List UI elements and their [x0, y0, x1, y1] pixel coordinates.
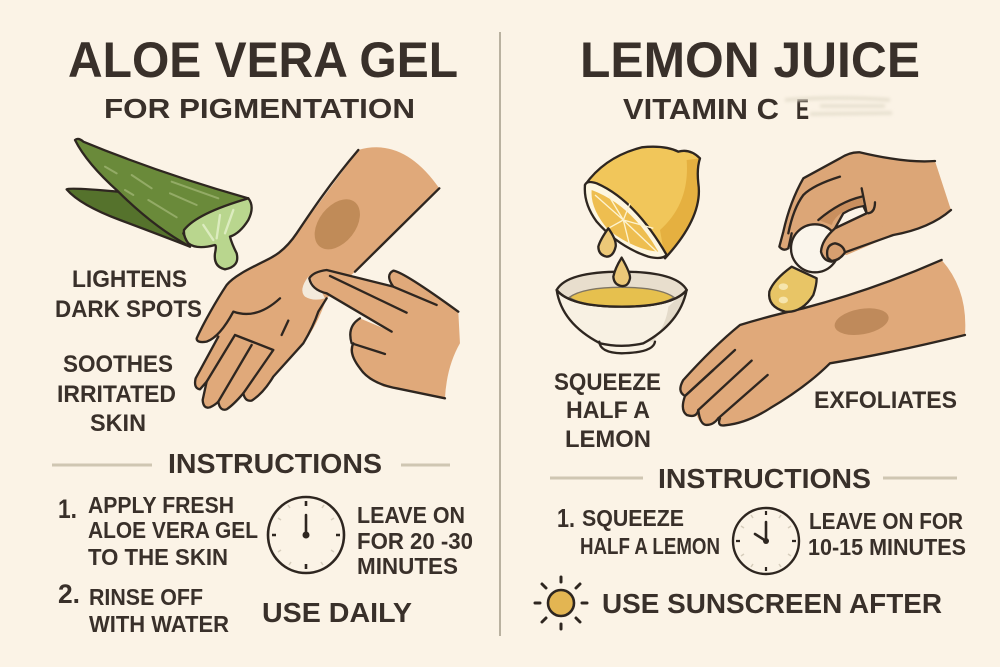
illustration: lower arm with dark spot [680, 260, 965, 425]
illustration: hands applying gel [195, 147, 460, 410]
benefit: exfoliates: EXFOLIATES [814, 387, 957, 414]
step 2: rinse [58, 579, 229, 637]
step 1: squeeze half a lemon: SQUEEZE [582, 505, 684, 531]
note: use sunscreen after: USE SUNSCREEN AFTER [602, 588, 942, 619]
step 1: apply gel: APPLY FRESH [88, 492, 234, 518]
subtitle: vitamin c e [623, 94, 892, 126]
illustration: lemon half [585, 147, 700, 258]
step 2: rinse: RINSE OFF [89, 584, 203, 610]
benefit: soothes irritated skin: SKIN [90, 410, 146, 437]
step 1: apply gel: ALOE VERA GEL [88, 517, 258, 543]
heading: instructions: INSTRUCTIONS [658, 463, 871, 494]
title: lemon juice: LEMON JUICE [580, 32, 920, 88]
panel: lemon juice [535, 32, 966, 629]
step 1: apply gel: 1. [58, 494, 77, 524]
benefit: lightens dark spots [55, 266, 202, 323]
step 1: apply gel: TO THE SKIN [88, 544, 228, 570]
duration: leave on 20-30 minutes: FOR 20 -30 [357, 528, 473, 554]
step 1: apply gel [58, 492, 258, 570]
benefit: soothes irritated skin: SOOTHES [63, 351, 173, 378]
subtitle: for pigmentation: FOR PIGMENTATION [104, 93, 415, 124]
benefit: soothes irritated skin: IRRITATED [57, 381, 176, 408]
panel: aloe vera gel [52, 32, 473, 637]
icon: clock [268, 497, 344, 573]
duration: leave on 10-15 minutes [808, 508, 966, 560]
title: aloe vera gel: ALOE VERA GEL [68, 32, 458, 88]
label: squeeze half a lemon: SQUEEZE [554, 369, 661, 396]
benefit: lightens dark spots: DARK SPOTS [55, 296, 202, 323]
step 2: rinse: WITH WATER [89, 611, 229, 637]
subtitle: vitamin c e: E [796, 94, 809, 126]
duration: leave on 20-30 minutes: LEAVE ON [357, 502, 465, 528]
step 2: rinse: 2. [58, 579, 80, 609]
icon: clock [733, 508, 799, 574]
subtitle: vitamin c e: VITAMIN C [623, 94, 779, 126]
benefit: lightens dark spots: LIGHTENS [72, 266, 187, 293]
benefit: soothes irritated skin [57, 351, 176, 437]
label: squeeze half a lemon: LEMON [565, 426, 651, 453]
icon: sun [535, 577, 587, 629]
illustration: hand holding cotton applicator [769, 152, 951, 312]
step 1: squeeze half a lemon: HALF A LEMON [580, 533, 720, 559]
duration: leave on 20-30 minutes: MINUTES [357, 553, 458, 579]
step 1: squeeze half a lemon: 1. [557, 503, 575, 533]
duration: leave on 10-15 minutes: 10-15 MINUTES [808, 534, 966, 560]
illustration: bowl of lemon juice [557, 258, 687, 353]
step 1: squeeze half a lemon [557, 503, 720, 559]
heading: instructions: INSTRUCTIONS [168, 448, 382, 479]
note: use daily: USE DAILY [262, 597, 412, 628]
duration: leave on 20-30 minutes [357, 502, 473, 579]
label: squeeze half a lemon: HALF A [566, 397, 650, 424]
duration: leave on 10-15 minutes: LEAVE ON FOR [809, 508, 963, 534]
illustration: aloe leaf with gel [67, 139, 252, 269]
label: squeeze half a lemon [554, 369, 661, 453]
